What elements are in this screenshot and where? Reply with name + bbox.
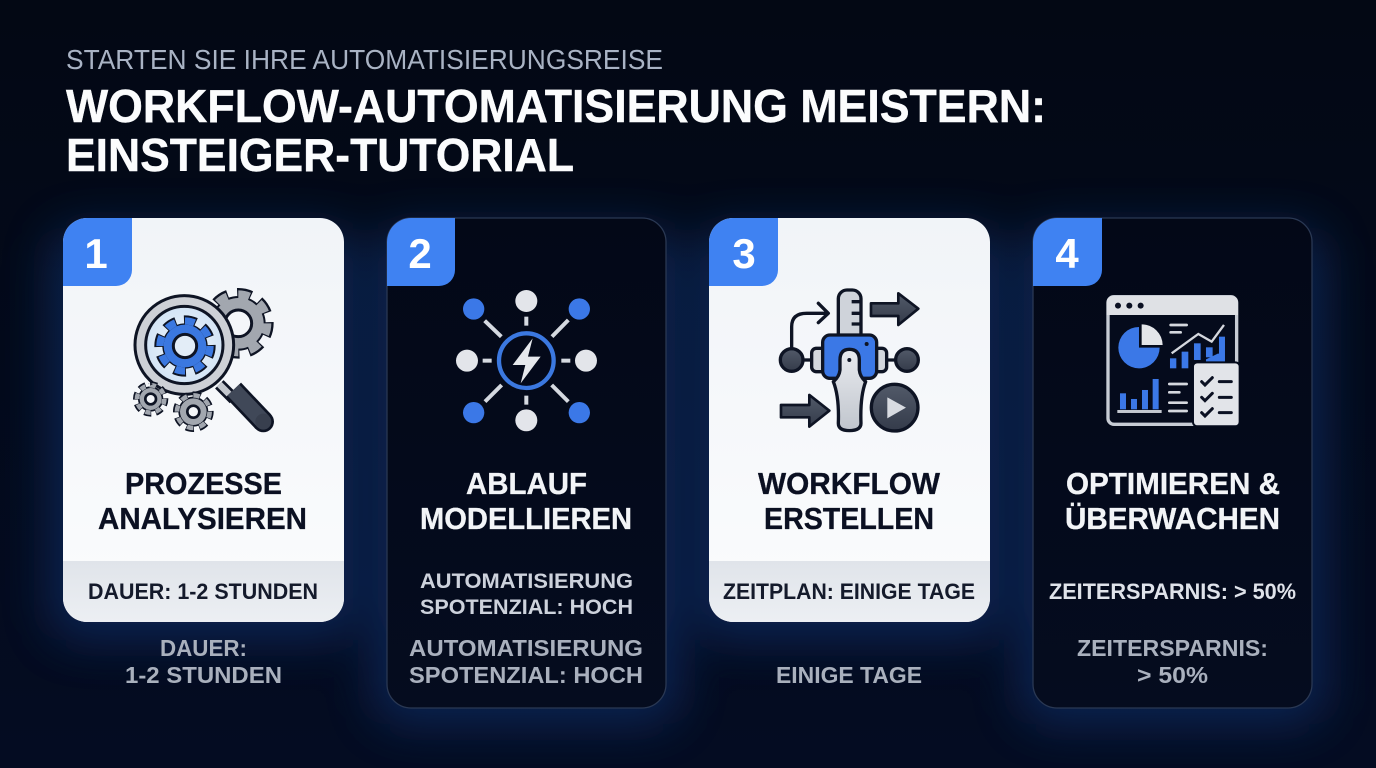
card body 3 [709,218,990,622]
icon: dashboard and checklist [1107,296,1240,427]
number badge 4: 4 [1055,230,1079,277]
card body 1 [63,218,344,622]
step heading 1: PROZESSE [125,467,282,501]
card body 4 [1033,218,1312,708]
number badge 2 [387,218,455,286]
step heading 2: ABLAUF [466,467,587,501]
number badge 2: 2 [408,230,432,277]
number badge 1: 1 [84,230,108,277]
band text 1: DAUER: 1-2 STUNDEN [88,579,318,604]
step heading 4: ÜBERWACHEN [1065,501,1280,536]
detail text 1: DAUER: [160,635,247,661]
band text 3: ZEITPLAN: EINIGE TAGE [723,579,975,604]
icon: magnifier and gears [135,294,274,432]
step heading 2: MODELLIEREN [420,502,632,536]
panel: step 2 [387,218,666,708]
number badge 1 [63,218,132,286]
number badge 4 [1033,218,1102,286]
title [66,80,1046,181]
band text 2: AUTOMATISIERUNG [420,569,633,593]
duration band 1 [63,561,344,622]
panel: step 1 [63,218,344,688]
panel: step 4 [1033,218,1312,708]
icon: network with lightning [456,290,597,431]
step heading 3 [758,467,940,536]
step heading 1: ANALYSIEREN [98,502,307,536]
card body 2 [387,218,666,708]
number badge 3: 3 [732,230,756,277]
eyebrow heading: STARTEN SIE IHRE AUTOMATISIERUNGSREISE [66,44,663,75]
duration band 3 [709,561,990,622]
panel: step 3 [709,218,990,688]
title: WORKFLOW-AUTOMATISIERUNG MEISTERN: [66,80,1046,132]
step heading 2 [420,467,632,536]
detail text 4: > 50% [1137,662,1208,688]
title: EINSTEIGER-TUTORIAL [66,129,574,181]
band text 4: ZEITERSPARNIS: > 50% [1049,579,1296,604]
detail text 2: AUTOMATISIERUNG [409,635,643,661]
detail text 1: 1-2 STUNDEN [125,662,282,688]
icon: workflow tool [780,290,918,431]
step heading 1 [98,467,307,536]
detail text 4 [1077,635,1268,688]
band text 2: SPOTENZIAL: HOCH [420,595,633,619]
card glow [50,228,1325,724]
band text 2 [420,569,633,619]
detail text 4: ZEITERSPARNIS: [1077,635,1268,661]
detail text 3: EINIGE TAGE [776,662,922,688]
detail text 2: SPOTENZIAL: HOCH [409,662,643,688]
number badge 3 [709,218,778,286]
step heading 4: OPTIMIEREN & [1066,467,1280,501]
step heading 3: WORKFLOW [758,467,940,501]
detail text 2 [409,635,643,688]
step heading 3: ERSTELLEN [764,502,934,536]
detail text 1 [125,635,282,688]
step heading 4 [1065,467,1280,536]
